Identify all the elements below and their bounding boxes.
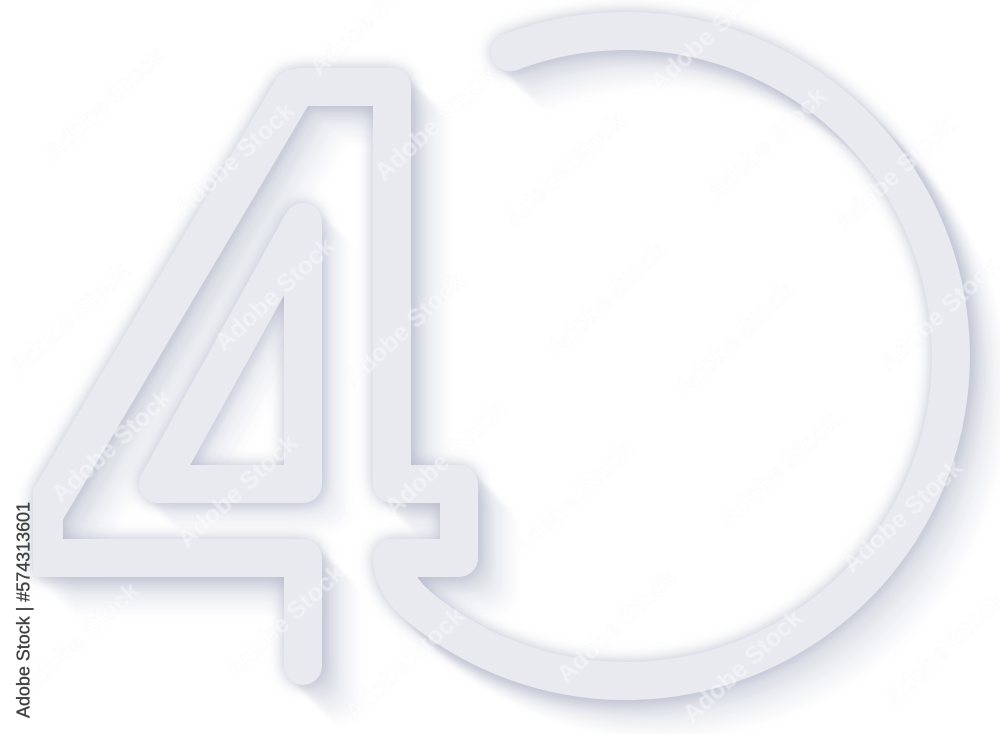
inner 4 triangle	[158, 222, 303, 484]
watermark pattern: Adobe Stock	[339, 602, 470, 726]
watermark pattern: Adobe Stock	[39, 42, 170, 166]
watermark pattern: Adobe Stock	[172, 429, 303, 553]
soft glow: inner 4 triangle	[158, 222, 303, 484]
watermark pattern: Adobe Stock	[46, 384, 177, 508]
watermark pattern: Adobe Stock	[499, 107, 630, 231]
stock id label, vertical: Adobe Stock | #574313601	[14, 502, 34, 718]
watermark pattern: Adobe Stock	[829, 112, 960, 236]
watermark pattern: Adobe Stock	[701, 82, 832, 206]
watermark pattern: Adobe Stock	[209, 232, 340, 356]
watermark pattern: Adobe Stock	[219, 559, 350, 683]
watermark pattern: Adobe Stock	[714, 407, 845, 531]
watermark pattern: Adobe Stock	[4, 257, 135, 381]
long shadow: inner 4 triangle	[164, 228, 333, 514]
watermark pattern: Adobe Stock	[369, 62, 500, 186]
watermark pattern: Adobe Stock	[669, 277, 800, 401]
watermark pattern: Adobe Stock	[14, 577, 145, 701]
watermark pattern: Adobe Stock	[379, 397, 510, 521]
watermark pattern: Adobe Stock	[339, 267, 470, 391]
watermark pattern: Adobe Stock	[677, 604, 808, 728]
watermark pattern: Adobe Stock	[551, 564, 682, 688]
watermark pattern: Adobe Stock	[507, 437, 638, 561]
watermark pattern: Adobe Stock	[837, 454, 968, 578]
watermark pattern: Adobe Stock	[541, 237, 672, 361]
watermark pattern: Adobe Stock	[169, 97, 300, 221]
